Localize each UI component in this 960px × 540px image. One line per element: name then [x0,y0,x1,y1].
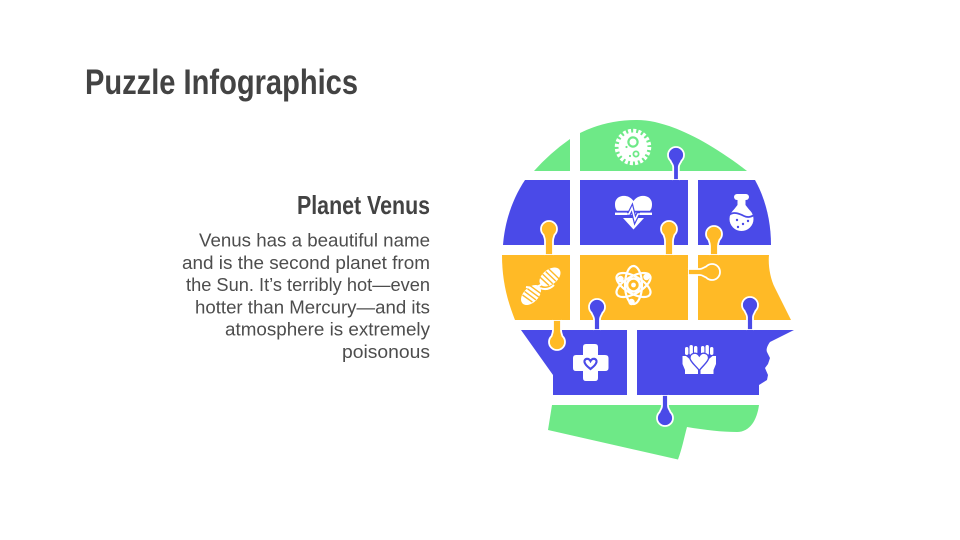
heading: Planet Venus: Planet Venus [297,190,430,220]
title: Puzzle Infographics [85,63,358,102]
puzzle piece: blue lower left [521,330,627,395]
body text: the Sun. It’s terribly hot—even [186,275,430,295]
body text [182,230,430,362]
puzzle piece: blue upper left [503,180,570,245]
puzzle tab: orange into blue centre [661,221,677,256]
body text: Venus has a beautiful name [199,230,430,250]
body text: hotter than Mercury—and its [195,297,430,317]
puzzle piece: blue lower right with face profile [637,330,794,395]
body text: poisonous [342,342,430,362]
icon: medical cross with heart [573,344,608,381]
icon: chemistry flask [729,194,754,231]
body text: atmosphere is extremely [225,320,430,340]
puzzle piece: green top left [534,139,570,171]
puzzle piece: orange right [698,255,791,320]
text block: Planet Venus [182,190,430,362]
icon: DNA helix [517,264,564,309]
puzzle piece: blue upper right [698,180,771,245]
puzzle tab: orange sideways into orange right [686,264,720,280]
icon: hands holding heart [682,345,716,374]
body text: and is the second planet from [182,253,430,273]
puzzle tab: blue into green top [668,147,684,182]
puzzle head [502,120,794,460]
puzzle tab: orange into blue left [541,221,557,256]
puzzle piece: green bottom [548,405,759,460]
puzzle piece: orange left [502,255,570,320]
puzzle piece: blue upper centre [580,180,688,245]
puzzle tab: blue into orange centre [589,299,605,332]
puzzle piece: green top [580,120,747,171]
puzzle piece: orange centre [580,255,688,320]
puzzle tab: orange into blue right [706,226,722,256]
icon: atom [613,266,654,305]
icon: heart with pulse [615,196,652,230]
puzzle tab: blue into orange right [742,297,758,332]
icon: saw-edged microbe [617,131,649,163]
puzzle tab: orange into blue lower left [549,318,565,350]
puzzle tab: blue into green bottom [657,394,673,426]
